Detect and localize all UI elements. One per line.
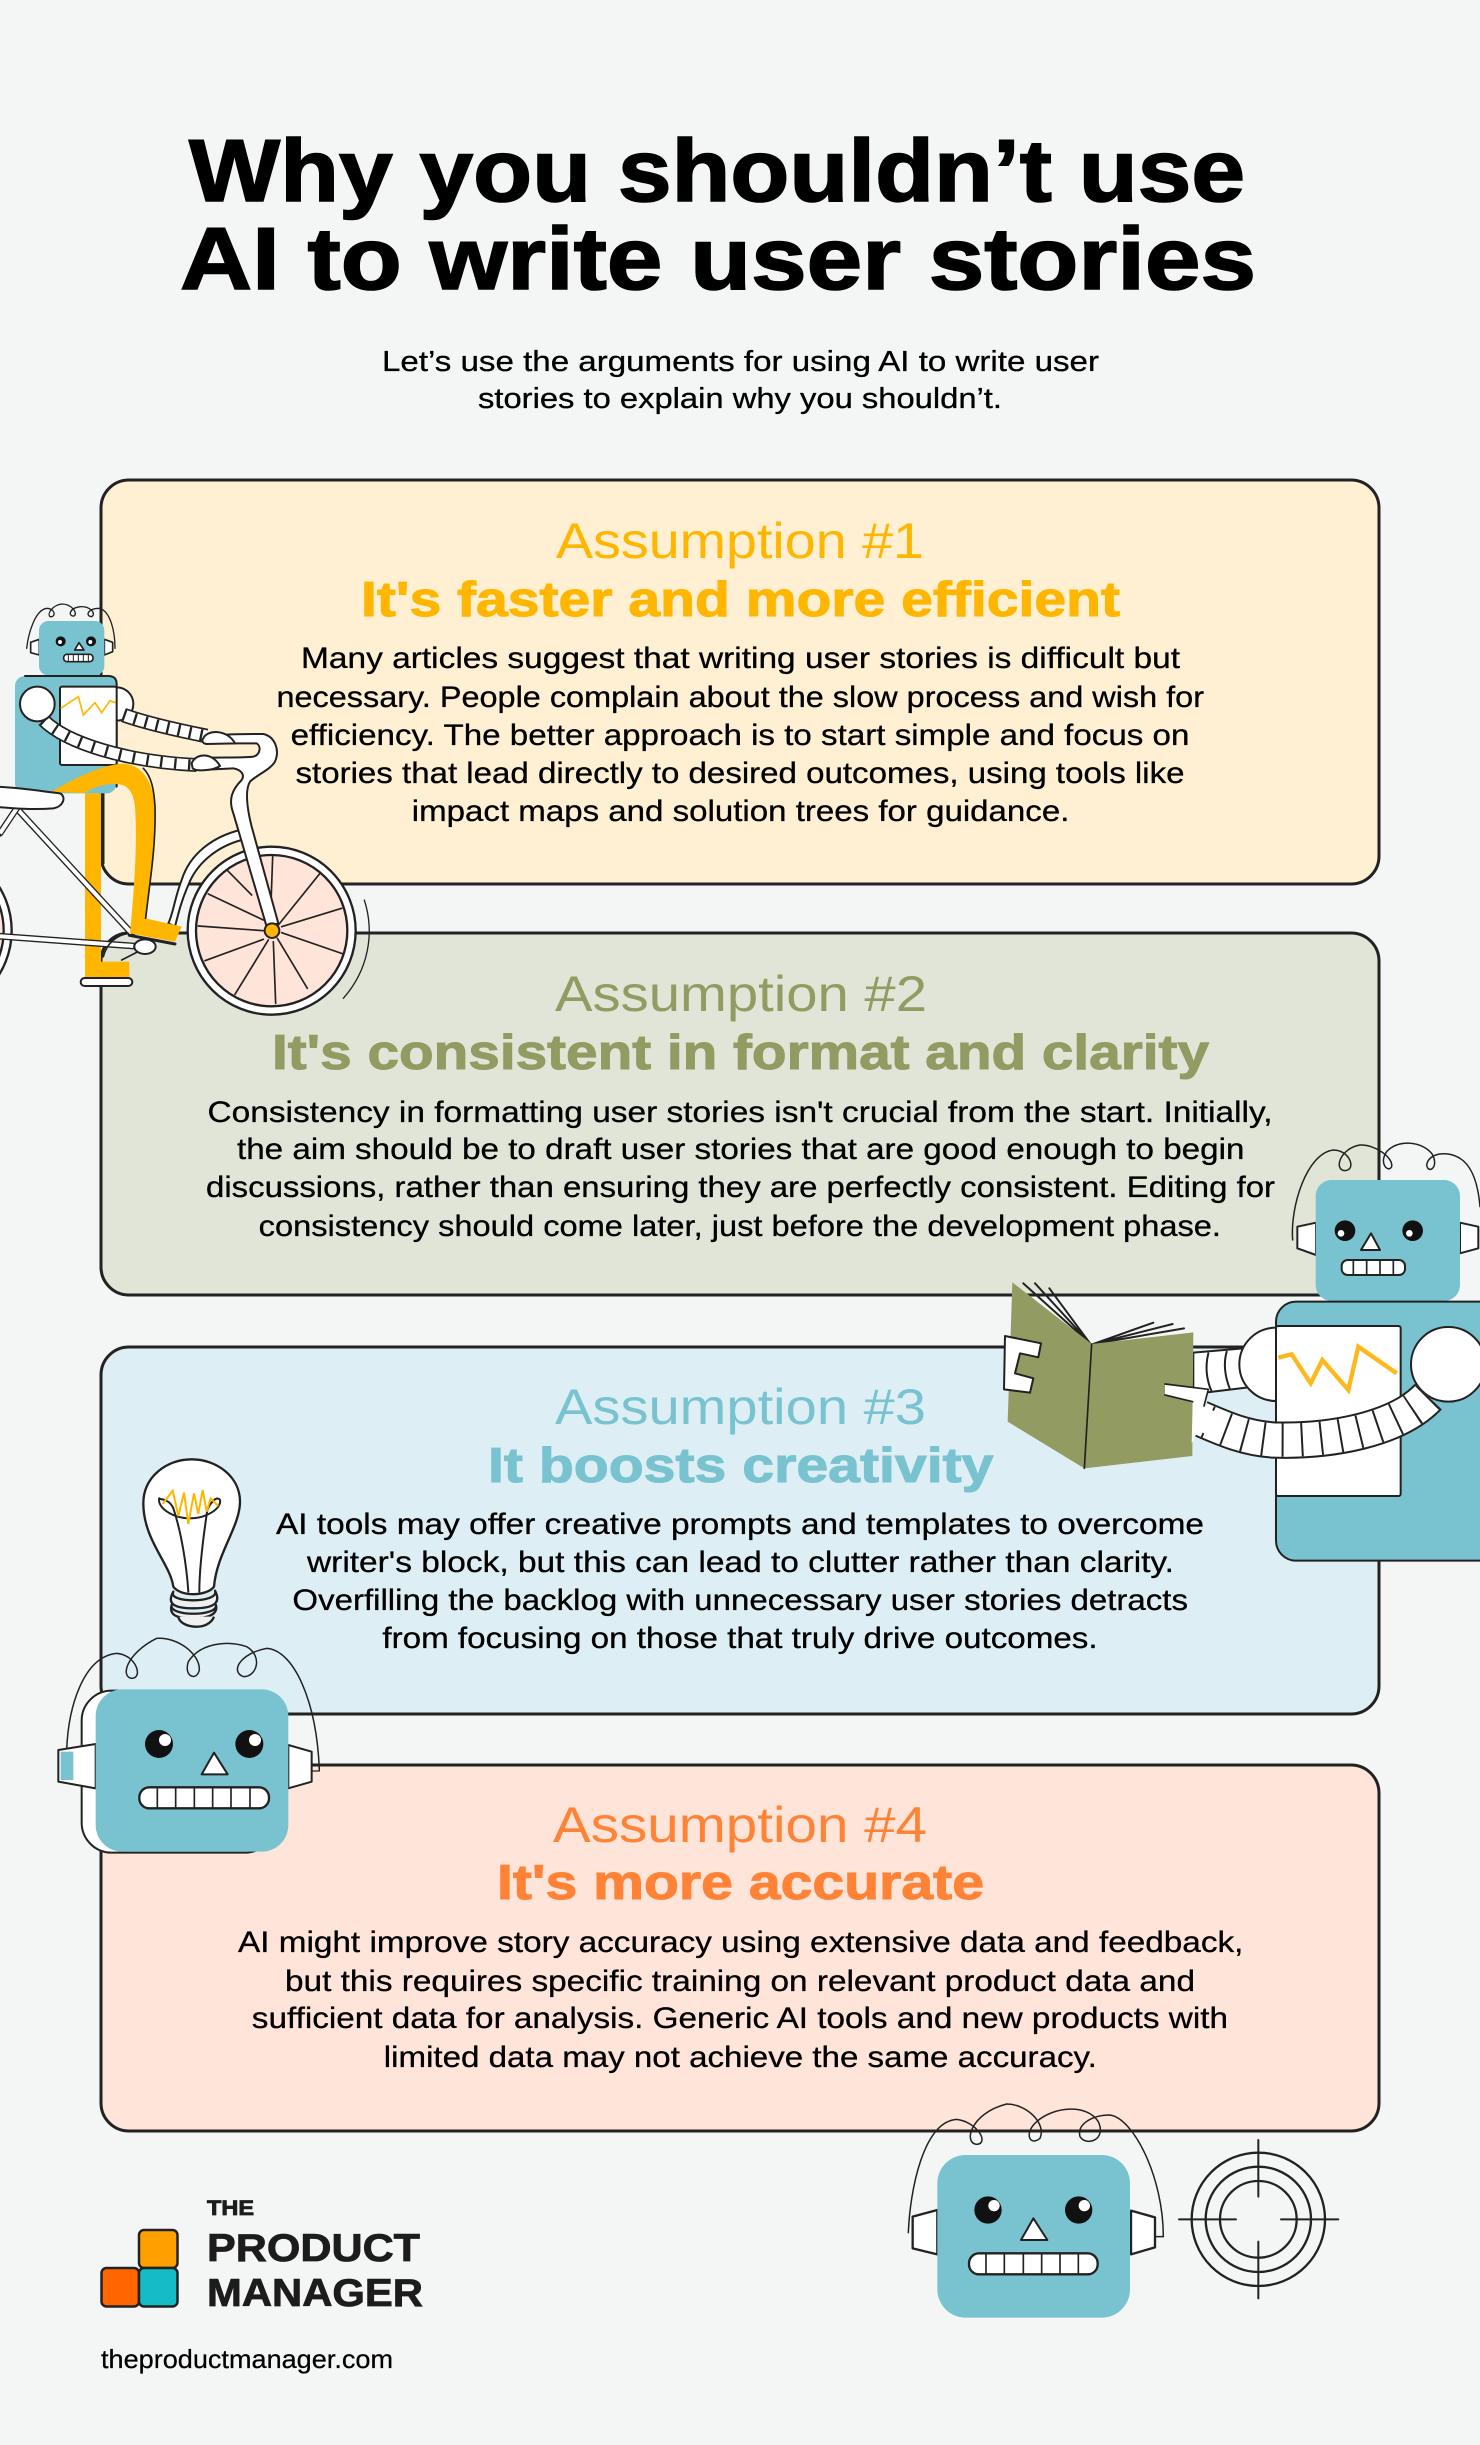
robot head (1292, 1143, 1480, 1301)
heading: assumption 4: It's more accurate (497, 1856, 984, 1910)
subtitle: stories to explain why you shouldn’t. (478, 383, 1002, 415)
logo wordmark (207, 2197, 423, 2315)
title: Why you shouldn’t use (189, 121, 1245, 220)
body text: assumption 4: AI might improve story accuracy using extensive data and feedback, (238, 1926, 1243, 1959)
body text: assumption 4: sufficient data for analysis. Generic AI tools and new products with (252, 2002, 1228, 2035)
antenna wire (908, 2104, 1163, 2237)
ears (913, 2210, 1155, 2254)
panel: assumption 4 (101, 1765, 1379, 2131)
leg edge (143, 768, 155, 918)
body text: assumption 2: the aim should be to draft user stories that are good enough to begin (237, 1133, 1244, 1166)
heading: assumption 2: It's consistent in format and clarity (272, 1026, 1209, 1080)
rear wheel (0, 847, 12, 1014)
body text: assumption 1: impact maps and solution trees for guidance. (412, 795, 1069, 828)
antenna wire (67, 1638, 319, 1770)
panel: assumption 2 (101, 933, 1379, 1295)
logo wordmark: MANAGER (207, 2272, 423, 2315)
back leg (81, 793, 132, 986)
title (180, 121, 1256, 308)
subtitle (382, 346, 1099, 415)
body text: assumption 3: Overfilling the backlog with unnecessary user stories detracts (292, 1584, 1188, 1617)
body text: assumption 3: AI tools may offer creative prompts and templates to overcome (276, 1508, 1204, 1541)
logo mark (102, 2230, 178, 2306)
head back (82, 1691, 275, 1853)
body text: assumption 1: stories that lead directly to desired outcomes, using tools like (296, 757, 1184, 790)
heading: assumption 2: Assumption #2 (555, 966, 927, 1022)
fender (168, 830, 242, 927)
heading: assumption 4 (497, 1797, 984, 1910)
icon: target (1179, 2140, 1338, 2298)
robot torso (1193, 1302, 1480, 1561)
front leg (52, 764, 182, 942)
robot torso (15, 676, 133, 793)
body text: assumption 2: discussions, rather than ensuring they are perfectly consistent. Editing for (206, 1171, 1275, 1204)
robot arms (20, 687, 235, 770)
illustration: robot reading a book (1004, 1143, 1480, 1561)
pedal sole (129, 935, 175, 944)
illustration: robot head with light bulb (58, 1638, 319, 1853)
heading: assumption 1: It's faster and more efficient (361, 573, 1120, 627)
body text: assumption 4: limited data may not achieve the same accuracy. (384, 2041, 1097, 2074)
body text: assumption 2: consistency should come later, just before the development phase. (259, 1210, 1221, 1243)
body text: assumption 3: from focusing on those that truly drive outcomes. (382, 1622, 1098, 1655)
body text: assumption 3 (276, 1508, 1204, 1655)
ears (58, 1744, 319, 1788)
book (1008, 1282, 1193, 1468)
heading: assumption 4: Assumption #4 (553, 1797, 927, 1853)
heading: assumption 3 (488, 1379, 994, 1493)
bicycle frame (0, 808, 156, 960)
body text: assumption 3: writer's block, but this can lead to clutter rather than clarity. (306, 1546, 1174, 1579)
heading: assumption 2 (272, 966, 1209, 1080)
title: AI to write user stories (180, 209, 1256, 308)
logo (102, 2197, 423, 2315)
panel: assumption 1 (101, 480, 1379, 884)
robot front arm (1165, 1384, 1428, 1443)
body text: assumption 1: necessary. People complain about the slow process and wish for (276, 681, 1204, 714)
subtitle: Let’s use the arguments for using AI to write user (382, 346, 1099, 378)
face (937, 2155, 1130, 2318)
body text: assumption 2 (206, 1096, 1275, 1243)
body text: assumption 1 (276, 642, 1204, 828)
illustration: robot head and target (908, 2104, 1338, 2318)
icon: light bulb (143, 1459, 240, 1627)
body text: assumption 4 (238, 1926, 1243, 2074)
seat (0, 787, 63, 809)
body text: assumption 2: Consistency in formatting user stories isn't crucial from the start. Initially, (208, 1096, 1272, 1129)
logo wordmark: THE (207, 2197, 254, 2220)
logo wordmark: PRODUCT (207, 2227, 420, 2270)
illustration: robot riding a bicycle (0, 604, 369, 1015)
website url: theproductmanager.com (101, 2344, 393, 2374)
heading: assumption 1 (361, 513, 1120, 627)
heading: assumption 3: It boosts creativity (488, 1439, 994, 1493)
front wheel (188, 847, 369, 1015)
body text: assumption 4: but this requires specific training on relevant product data and (285, 1965, 1195, 1998)
robot head (27, 604, 115, 675)
left hand on book (1004, 1336, 1041, 1393)
body text: assumption 1: efficiency. The better approach is to start simple and focus on (291, 719, 1189, 752)
body text: assumption 1: Many articles suggest that writing user stories is difficult but (301, 642, 1181, 675)
heading: assumption 1: Assumption #1 (556, 513, 924, 569)
handlebar and fork (197, 734, 278, 927)
panel: assumption 3 (101, 1347, 1379, 1714)
face (96, 1689, 288, 1852)
hub (265, 923, 279, 938)
heading: assumption 3: Assumption #3 (555, 1379, 926, 1435)
